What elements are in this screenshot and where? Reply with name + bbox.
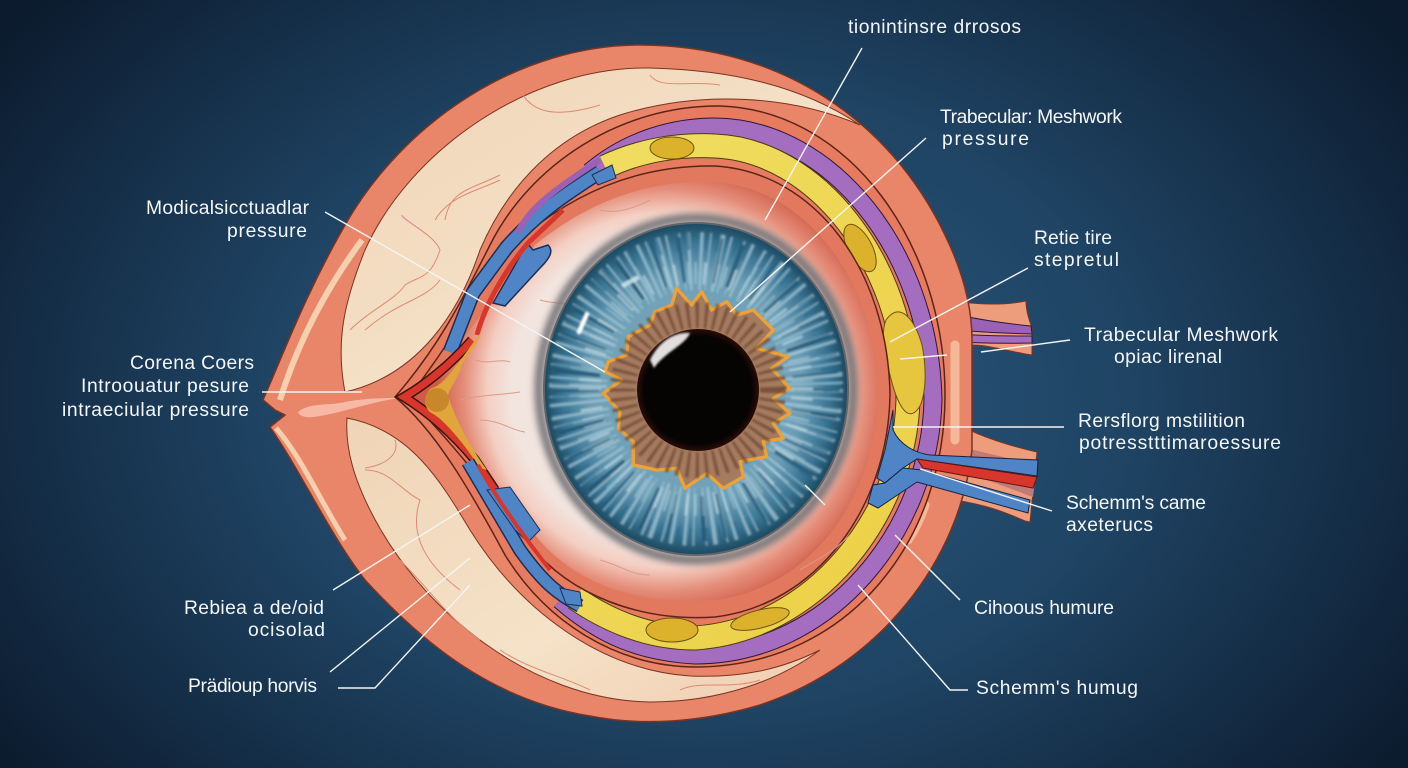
label: corena coers: Corena Coers [130,353,254,374]
label: retie tire: stepretul [1034,250,1119,271]
label: trabecular meshwork pressure [940,107,1122,150]
iris fibres [560,241,832,537]
label: rersflorg: potresstttimaroessure [1079,433,1281,454]
optic stub: upper nerve [885,270,1032,355]
inner red band [408,166,890,618]
label: rersflorg: Rersflorg mstilition [1078,411,1245,432]
collarette [603,288,790,488]
orange canal at apex [425,332,487,470]
label: corena coers: intraeciular pressure [62,400,249,421]
pupil [637,329,759,451]
red scleral band [395,106,945,667]
yellow layer [575,146,908,638]
label: schemm's came: Schemm's came [1066,493,1206,514]
label: cihoous humure: Cihoous humure [974,598,1114,619]
wall strips [908,345,955,540]
label: modical pressure: Modicalsicctuadlar [146,198,310,219]
label: retie tire: Retie tire [1034,228,1112,249]
label: trabecular meshwork opiac: opiac lirenal [1114,347,1222,368]
eye cross-section illustration [263,45,1038,722]
leader lines [262,48,1070,690]
optic stub: lower vessels [955,428,1037,522]
apex tube [298,398,400,417]
label: trabecular meshwork opiac: Trabecular Meshwork [1084,325,1278,346]
beige tissue upper [341,68,860,392]
collarette fibres [623,315,773,465]
iris highlights [579,278,637,332]
label: trabecular meshwork pressure: Trabecular: Meshwork [940,107,1122,128]
purple layer [560,127,933,655]
white of the eye [412,182,878,601]
sclera veins [460,200,850,575]
pupil reflection [650,333,690,368]
blue vessel upper left [450,160,616,352]
label: pradioup horvis: Prädioup horvis [188,676,317,697]
label: rebiea: Rebiea a de/oid [184,598,324,619]
capillaries [350,75,760,690]
iris [539,218,853,560]
red chevron at apex [404,340,495,490]
label: modical pressure [146,198,310,242]
blue vessel lower left [468,462,582,606]
label: schemm's humug: Schemm's humug [976,678,1138,699]
label: corena coers [62,353,254,421]
label: corena coers: Introouatur pesure [81,376,249,397]
outer wall [263,45,972,722]
beige tissue lower [347,418,820,702]
label: trabecular meshwork opiac [1084,325,1278,368]
label: trabecular meshwork pressure: pressure [942,129,1029,150]
iris halo [539,218,853,560]
label: top: tionintinsre drrosos [848,17,1021,38]
label: rebiea [184,598,325,641]
label: schemm's came [1066,493,1206,536]
label: modical pressure: pressure [227,221,307,242]
blue vessel right [868,410,1038,513]
label: rebiea: ocisolad [248,620,325,641]
label: rersflorg [1078,411,1281,454]
label: schemm's came: axeterucs [1066,515,1153,536]
label: retie tire [1034,228,1119,271]
outer rim highlight [280,240,362,400]
yellow nodules [646,137,925,642]
